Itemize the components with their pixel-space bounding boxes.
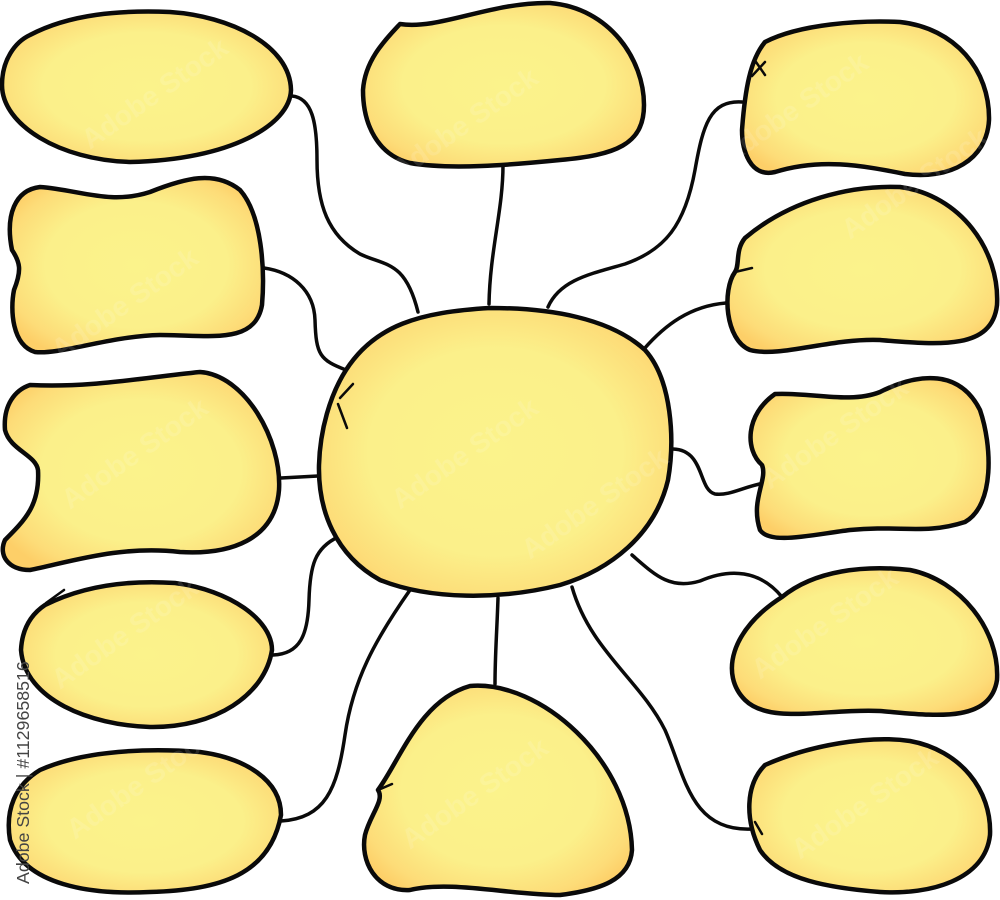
watermark text: Adobe Stock bbox=[756, 371, 914, 495]
node: right middle bbox=[751, 378, 989, 538]
watermark text: Adobe Stock bbox=[786, 741, 944, 865]
node: bottom left bbox=[9, 750, 281, 892]
overlap ticks bbox=[46, 62, 765, 834]
node: bottom right bbox=[749, 739, 990, 892]
watermark text: Adobe Stock bbox=[716, 46, 874, 170]
watermark text: Adobe Stock bbox=[836, 121, 994, 245]
watermark text: Adobe Stock bbox=[56, 391, 214, 515]
watermark text: Adobe Stock bbox=[76, 31, 234, 155]
watermark text: Adobe Stock bbox=[516, 441, 674, 565]
node: top left bbox=[2, 12, 291, 162]
node: left upper bbox=[10, 178, 263, 352]
node: left middle bbox=[3, 372, 279, 570]
node: right upper bbox=[727, 187, 997, 352]
watermark text: Adobe Stock bbox=[61, 721, 219, 845]
stock id vertical text: Adobe Stock | #1129658516 bbox=[13, 661, 33, 884]
connectors bbox=[264, 96, 782, 829]
node: left lower bbox=[21, 582, 272, 727]
watermark text: Adobe Stock bbox=[46, 241, 204, 365]
node: bottom center bbox=[364, 686, 632, 895]
watermark text: Adobe Stock bbox=[746, 561, 904, 685]
watermark text: Adobe Stock bbox=[386, 391, 544, 515]
node: top right bbox=[742, 22, 989, 175]
central node bbox=[319, 308, 671, 596]
node: right lower bbox=[732, 568, 997, 715]
watermark text: Adobe Stock bbox=[386, 61, 544, 185]
watermark text: Adobe Stock bbox=[396, 731, 554, 855]
node: top center bbox=[363, 3, 644, 166]
watermark text: Adobe Stock bbox=[46, 571, 204, 695]
